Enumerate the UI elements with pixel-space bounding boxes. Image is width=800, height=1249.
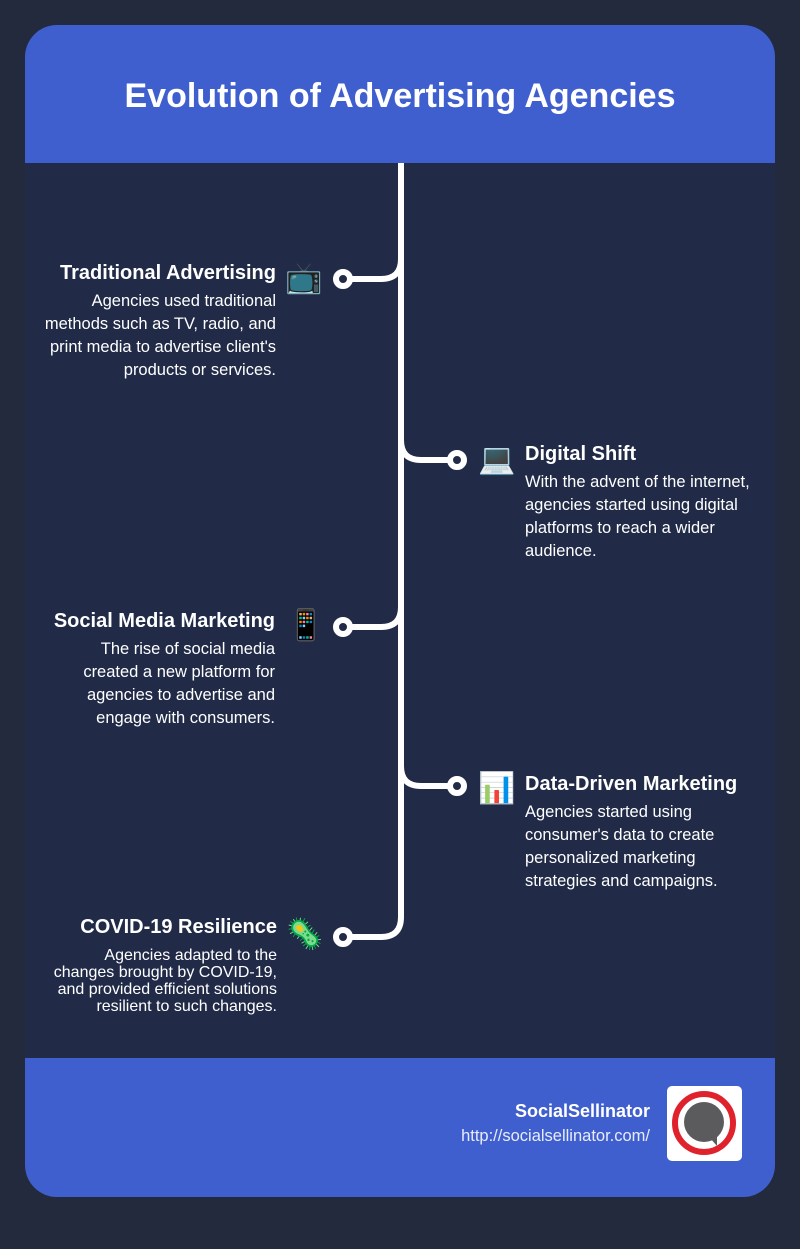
- item: social media marketing: agencies to advertise and: [87, 686, 275, 704]
- item: covid-19 resilience: [54, 916, 277, 1015]
- item: social media marketing: engage with consumers.: [96, 709, 275, 727]
- icon: laptop: 💻: [478, 442, 515, 477]
- item: digital shift: audience.: [525, 542, 597, 560]
- icon: chart: 📊: [478, 771, 515, 806]
- header: Evolution of Advertising Agencies: [124, 77, 676, 115]
- item: traditional advertising: [45, 262, 276, 379]
- icon: phone: 📱: [287, 608, 324, 643]
- item: traditional advertising: methods such as TV, radio, and: [45, 315, 276, 333]
- item: data-driven marketing: [525, 773, 737, 890]
- item: traditional advertising: print media to advertise client's: [50, 338, 276, 356]
- item: digital shift: platforms to reach a wider: [525, 519, 715, 537]
- item: data-driven marketing: strategies and campaigns.: [525, 872, 718, 890]
- item: digital shift: Digital Shift: [525, 443, 636, 465]
- item: social media marketing: The rise of social media: [101, 640, 275, 658]
- item: social media marketing: [54, 610, 276, 727]
- footer text: SocialSellinator: [515, 1101, 650, 1121]
- item: covid-19 resilience: COVID-19 Resilience: [80, 916, 277, 938]
- icon: tv: 📺: [285, 261, 322, 296]
- logo: [667, 1086, 742, 1161]
- footer: [25, 1058, 775, 1197]
- item: digital shift: agencies started using digital: [525, 496, 738, 514]
- item: covid-19 resilience: changes brought by COVID-19,: [54, 964, 277, 981]
- timeline: [333, 163, 467, 947]
- item: data-driven marketing: consumer's data to create: [525, 826, 714, 844]
- item: digital shift: With the advent of the internet,: [525, 473, 750, 491]
- footer text: [461, 1101, 650, 1145]
- icon: virus: 🦠: [286, 917, 323, 952]
- footer text: http://socialsellinator.com/: [461, 1127, 650, 1145]
- item: covid-19 resilience: and provided efficient solutions: [58, 981, 277, 998]
- item: covid-19 resilience: resilient to such changes.: [96, 998, 277, 1015]
- item: data-driven marketing: Agencies started using: [525, 803, 692, 821]
- item: traditional advertising: products or services.: [124, 361, 276, 379]
- item: social media marketing: Social Media Marketing: [54, 610, 275, 632]
- item: traditional advertising: Agencies used traditional: [92, 292, 276, 310]
- item: covid-19 resilience: Agencies adapted to the: [104, 947, 277, 964]
- item: social media marketing: created a new platform for: [83, 663, 275, 681]
- item: digital shift: [525, 443, 750, 560]
- item: traditional advertising: Traditional Advertising: [60, 262, 276, 284]
- item: data-driven marketing: personalized marketing: [525, 849, 696, 867]
- item: data-driven marketing: Data-Driven Marketing: [525, 773, 737, 795]
- header: [25, 25, 775, 163]
